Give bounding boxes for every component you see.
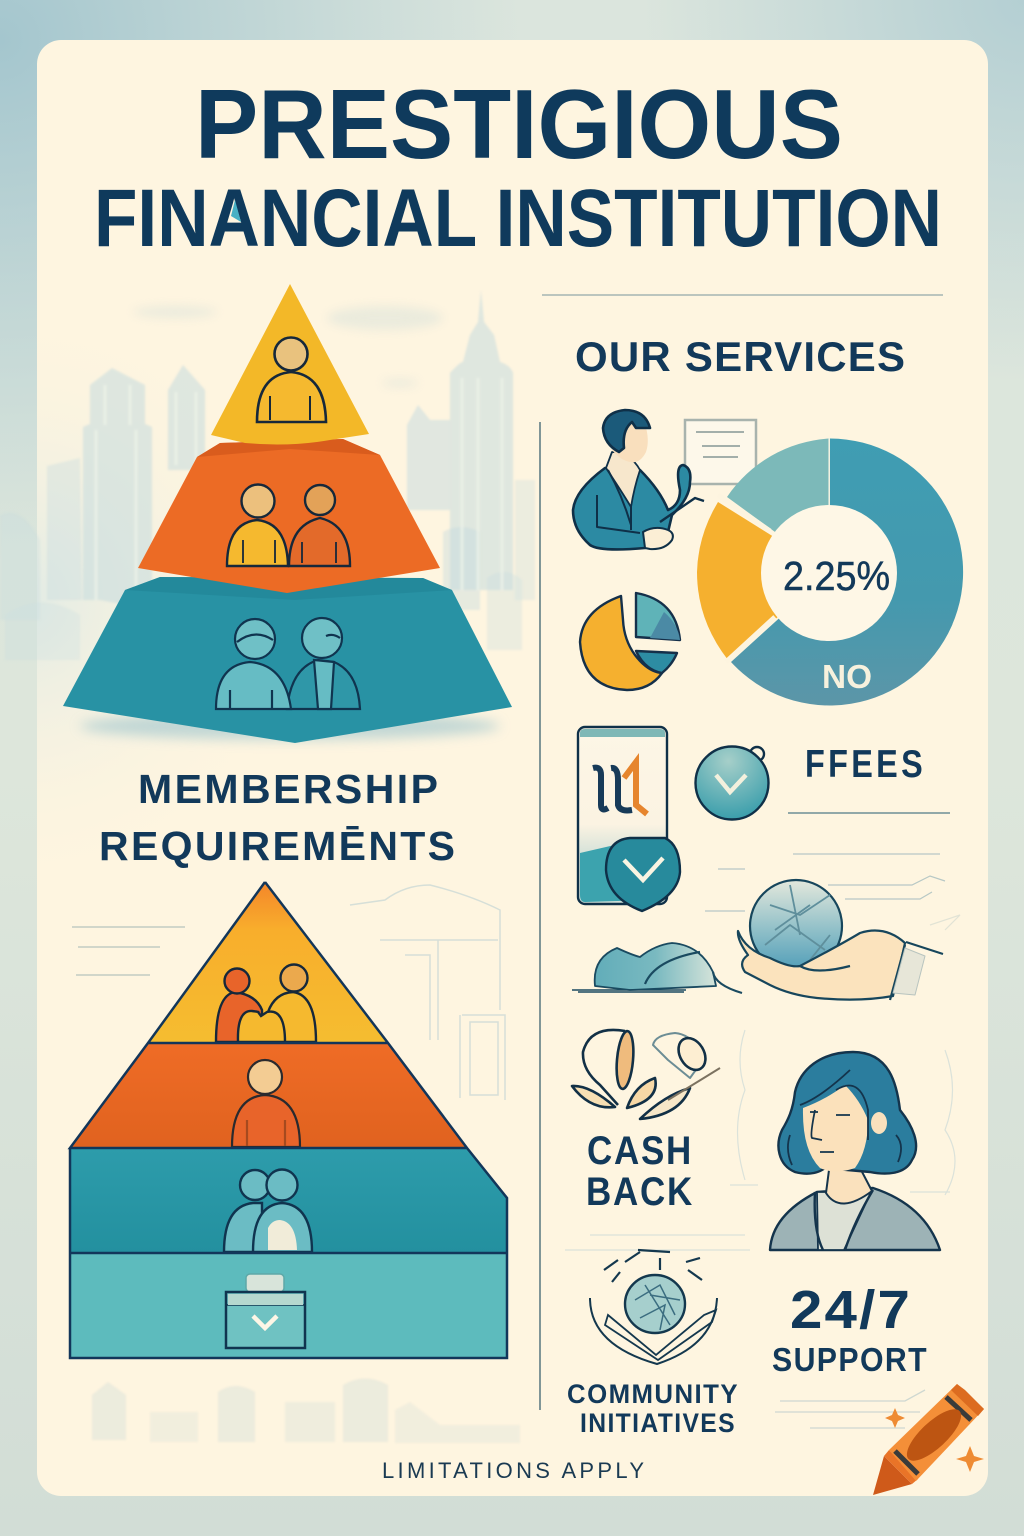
icon: crayon with sparkles xyxy=(873,1384,984,1495)
tier: orange xyxy=(70,1043,467,1148)
tier: dark teal xyxy=(70,1148,507,1253)
icon: document xyxy=(685,420,756,484)
label: cash back: BACK xyxy=(586,1170,694,1214)
tier: light teal xyxy=(70,1253,507,1358)
pyramid shadow xyxy=(80,712,500,740)
icon: hand holding globe xyxy=(738,880,943,1000)
donut label: NO xyxy=(822,658,872,695)
decorative lines right xyxy=(705,813,960,930)
teal tier xyxy=(63,577,512,743)
decorative lines near cash back xyxy=(565,1030,955,1250)
icon: small pie chart xyxy=(580,593,680,690)
decorative lines near support xyxy=(775,1390,925,1428)
clouds xyxy=(133,306,443,387)
label: community initiatives: INITIATIVES xyxy=(580,1408,736,1438)
sparkle xyxy=(885,1408,905,1428)
icon: phone xyxy=(578,727,680,911)
donut center value: 2.25% xyxy=(783,553,890,599)
orange tier xyxy=(138,439,440,593)
heading: membership requirements: REQUIREMĒNTS xyxy=(99,823,455,869)
icon: phone logo mark xyxy=(593,762,647,814)
stat: 24/7 support xyxy=(772,1280,928,1378)
donut chart xyxy=(697,438,963,705)
icon: wave blob xyxy=(572,943,742,993)
icon: cash back xyxy=(572,1030,720,1119)
icon: community globe xyxy=(590,1250,717,1364)
label: fees: FFEES xyxy=(805,743,926,786)
icon: person on orange tier xyxy=(232,1060,300,1147)
tier outlines xyxy=(70,882,507,1358)
stat: 24/7 support: 24/7 xyxy=(790,1280,912,1340)
label: community initiatives: COMMUNITY xyxy=(567,1379,739,1409)
icon: people on yellow tier xyxy=(216,964,316,1042)
icon: one person on yellow xyxy=(257,338,326,422)
sparkle xyxy=(956,1446,984,1472)
icon: two teal people xyxy=(216,618,360,709)
divider lines xyxy=(540,295,943,1410)
upper pyramid xyxy=(63,284,512,743)
icon: check badge xyxy=(696,746,768,820)
icon: briefcase xyxy=(226,1274,305,1348)
yellow tier xyxy=(211,284,369,444)
tier: yellow top xyxy=(148,882,388,1043)
icon: two people on orange xyxy=(227,484,350,566)
icon: advisor xyxy=(573,410,704,549)
title: PRESTIGIOUS xyxy=(195,69,843,179)
label: cash back: CASH xyxy=(587,1129,693,1173)
lower pyramid xyxy=(70,882,507,1358)
title xyxy=(94,69,942,264)
label: community initiatives xyxy=(567,1379,739,1438)
heading: membership requirements: MEMBERSHIP xyxy=(138,766,438,812)
bottom faint skyline xyxy=(92,1378,520,1443)
faint decorative sketch, lower pyramid xyxy=(72,885,505,1100)
heading: membership requirements xyxy=(99,766,455,869)
stat: 24/7 support: SUPPORT xyxy=(772,1341,928,1378)
icon: people on teal tier xyxy=(224,1170,312,1252)
footer note: LIMITATIONS APPLY xyxy=(382,1458,644,1483)
icon: shield check xyxy=(606,838,680,911)
icon: support woman xyxy=(770,1052,940,1250)
label: cash back xyxy=(586,1129,694,1214)
heading: our services: OUR SERVICES xyxy=(575,333,905,380)
background skyline, upper left xyxy=(0,290,535,660)
